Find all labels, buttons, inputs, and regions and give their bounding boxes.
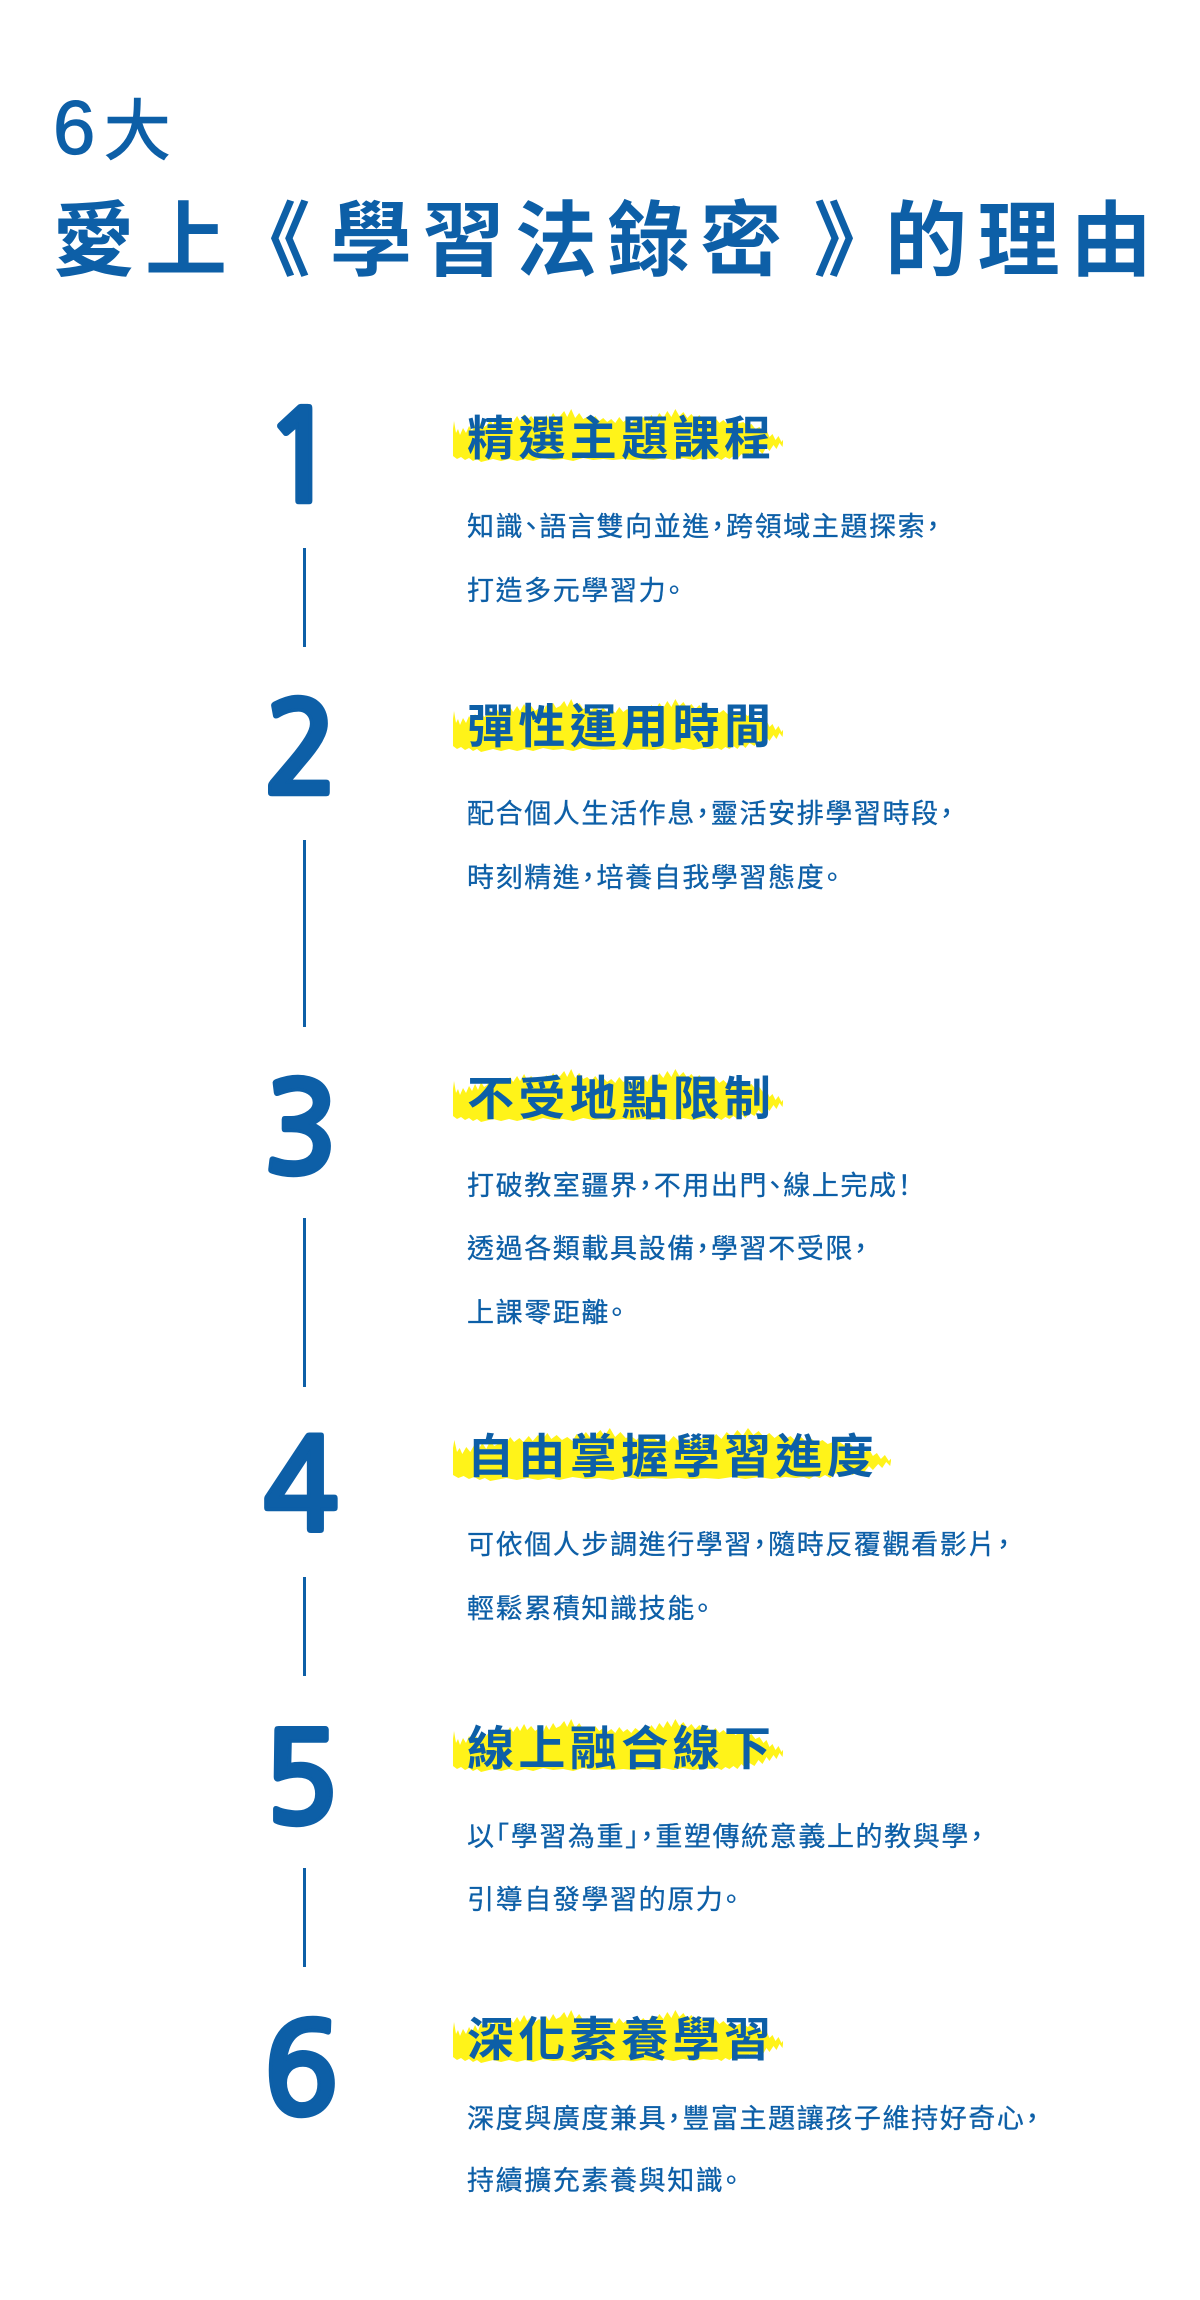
panel: reason 3	[263, 1060, 913, 1387]
heading: 線上融合線下	[467, 1710, 775, 1779]
number 4: 4	[263, 1424, 339, 1550]
title line 1	[53, 78, 170, 174]
description: 配合個人生活作息，靈活安排學習時段，	[467, 792, 955, 831]
panel: reason 4	[263, 1418, 1012, 1676]
heading: 精選主題課程	[467, 400, 775, 469]
heading: 深化素養學習	[467, 2001, 775, 2070]
heading highlight	[453, 1719, 783, 1772]
connector line	[303, 1868, 306, 1967]
heading: 彈性運用時間	[467, 688, 775, 757]
description line 2: 引導自發學習的原力。	[467, 1878, 740, 1917]
connector line	[303, 1218, 306, 1387]
description: 打破教室疆界，不用出門、線上完成！	[467, 1164, 913, 1203]
heading highlight	[453, 409, 783, 462]
description: 深度與廣度兼具，豐富主題讓孩子維持好奇心，	[467, 2097, 1041, 2136]
number 1: 1	[263, 395, 339, 521]
description line 2: 輕鬆累積知識技能。	[467, 1587, 711, 1626]
panel: reason 6	[263, 2001, 1041, 2198]
heading highlight	[453, 1428, 891, 1481]
title line 1: 6	[53, 86, 104, 171]
title line 1: 大	[104, 78, 170, 174]
connector line	[303, 1577, 306, 1676]
heading highlight	[453, 699, 783, 752]
number 2: 2	[263, 687, 339, 813]
number 6: 6	[263, 2008, 339, 2134]
heading: 不受地點限制	[467, 1060, 775, 1129]
description: 可依個人步調進行學習，隨時反覆觀看影片，	[467, 1523, 1012, 1562]
panel: reason 2	[263, 687, 955, 1027]
heading: 自由掌握學習進度	[467, 1418, 878, 1487]
connector line	[303, 548, 306, 647]
description: 知識、語言雙向並進，跨領域主題探索，	[467, 505, 941, 544]
panel: reason 5	[263, 1710, 985, 1967]
number 3: 3	[263, 1067, 339, 1193]
description line 2: 時刻精進，培養自我學習態度。	[467, 856, 840, 895]
description line 2: 透過各類載具設備，學習不受限，	[467, 1227, 869, 1266]
panel: reason 1	[263, 395, 941, 647]
connector line	[303, 840, 306, 1027]
title line 2: 愛上《學習法錄密 》的理由	[52, 174, 1163, 293]
description: 以「學習為重」，重塑傳統意義上的教與學，	[467, 1815, 985, 1854]
number 5: 5	[263, 1717, 339, 1843]
description line 2: 持續擴充素養與知識。	[467, 2159, 740, 2198]
description line 3: 上課零距離。	[467, 1291, 625, 1330]
title	[52, 78, 1163, 293]
heading highlight	[453, 2010, 783, 2063]
description line 2: 打造多元學習力。	[467, 569, 682, 608]
heading highlight	[453, 1069, 783, 1122]
